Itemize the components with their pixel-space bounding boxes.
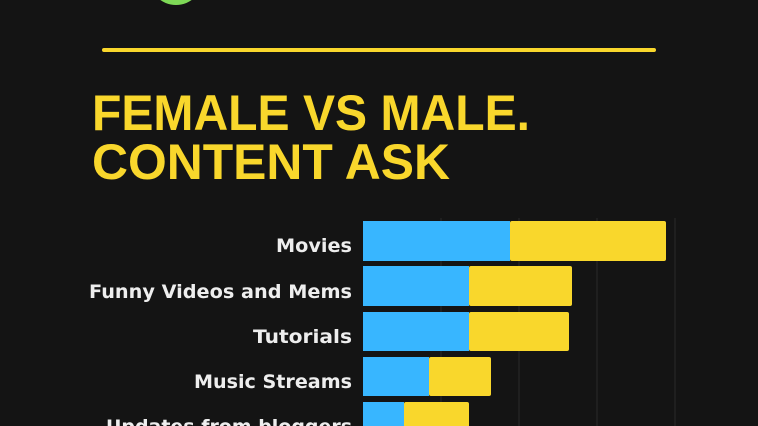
divider line (104, 48, 654, 52)
bar: Updates from bloggers (363, 402, 469, 426)
category labels: Funny Videos and Mems (89, 281, 352, 303)
bar: Music Streams (363, 357, 491, 396)
icon: green circle (149, 0, 203, 5)
title (92, 85, 530, 190)
title: FEMALE VS MALE. (92, 85, 530, 141)
title: CONTENT ASK (92, 134, 450, 190)
category labels: Tutorials (253, 326, 352, 348)
category labels (89, 235, 352, 426)
bar: Funny Videos (363, 266, 572, 306)
bar: Tutorials (363, 312, 569, 351)
bar: Movies (363, 221, 666, 261)
bar chart (89, 218, 675, 426)
category labels: Movies (276, 235, 352, 257)
category labels: Music Streams (194, 371, 352, 393)
